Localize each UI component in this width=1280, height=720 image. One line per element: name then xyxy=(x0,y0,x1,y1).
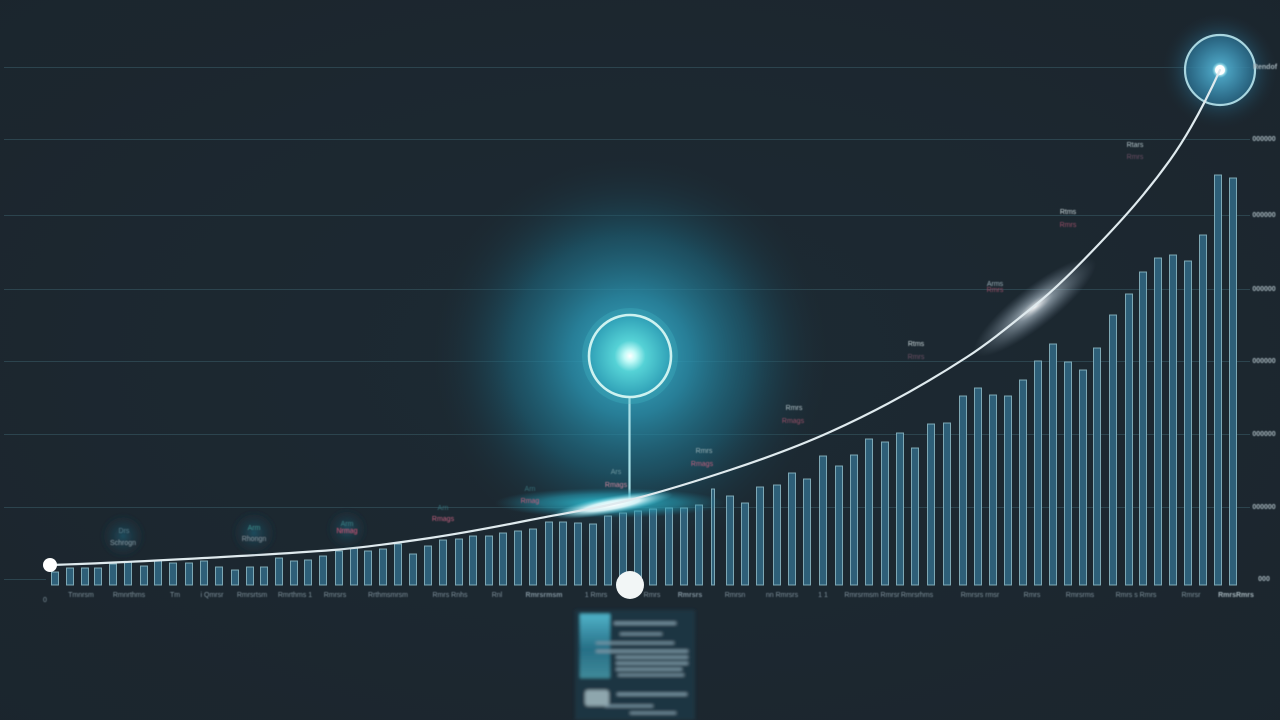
data callouts along the curve: Rmrs xyxy=(786,405,803,412)
top right marker xyxy=(1162,12,1278,128)
x axis labels: RmrsRmrs xyxy=(1218,592,1254,599)
x axis labels: i Qmrsr xyxy=(201,592,224,599)
x axis labels: Tm xyxy=(170,592,180,599)
x axis labels: Rmrs Rnhs xyxy=(432,592,468,599)
x axis labels: Rmrsrmsm Rmrsr xyxy=(844,592,900,599)
x axis labels: Rmnrthms xyxy=(113,592,146,599)
data callouts along the curve: Rmags xyxy=(782,418,805,425)
x axis labels: Tmnrsm xyxy=(68,592,94,599)
right axis labels: 000000 xyxy=(1252,286,1276,293)
x axis labels: Rmrsr xyxy=(1181,592,1201,599)
data callouts along the curve: Ars xyxy=(611,469,622,476)
thumbnail icon xyxy=(585,690,609,706)
data callouts along the curve: Rtms xyxy=(908,341,925,348)
data callouts along the curve: Rmrs xyxy=(1127,154,1144,161)
data callouts along the curve: Rmags xyxy=(605,482,628,489)
start point xyxy=(43,558,57,572)
right axis labels xyxy=(1252,64,1278,583)
x axis labels xyxy=(43,592,1254,604)
thumbnail text lines xyxy=(596,622,688,714)
x axis labels: Rmrsrms xyxy=(1066,592,1095,599)
x axis labels: Rmrthms 1 xyxy=(278,592,312,599)
growth curve xyxy=(50,70,1220,565)
data callouts along the curve: Rmrs xyxy=(908,354,925,361)
data callouts along the curve: Arm xyxy=(248,525,261,532)
central glow xyxy=(430,156,830,556)
thumbnail image xyxy=(580,614,610,678)
right axis labels: 000000 xyxy=(1252,136,1276,143)
data callouts along the curve xyxy=(99,142,1144,560)
data callouts along the curve: Arn xyxy=(525,486,536,493)
data callouts along the curve: Nrmag xyxy=(336,528,358,535)
x axis labels: 1 1 xyxy=(818,592,828,599)
x axis labels: Rmrsn xyxy=(725,592,745,599)
x axis labels: Rrthmsmrsm xyxy=(368,592,408,599)
data callouts along the curve: Rmrs xyxy=(1060,222,1077,229)
data callouts along the curve: Rtms xyxy=(1060,209,1077,216)
x axis labels: Rmrsrs rmsr xyxy=(961,592,1000,599)
data callouts along the curve: Arms xyxy=(987,281,1004,288)
data callouts along the curve: Rmag xyxy=(521,498,539,505)
x axis labels: Rmrsrtsm xyxy=(237,592,267,599)
right axis labels: 000000 xyxy=(1252,504,1276,511)
x axis labels: Rmrs xyxy=(1024,592,1041,599)
grid lines xyxy=(4,68,1250,580)
curve flare near the upper section xyxy=(963,244,1107,370)
x axis labels: Rmrsrs xyxy=(324,592,347,599)
axis marker dot xyxy=(616,571,644,599)
data callouts along the curve: Schrogn xyxy=(110,540,136,547)
x axis labels: 1 Rmrs xyxy=(585,592,608,599)
thumbnail panel xyxy=(575,610,695,720)
right axis labels: 000000 xyxy=(1252,212,1276,219)
x axis labels: Rmrsrmsm xyxy=(526,592,562,599)
x axis labels: 0 xyxy=(43,597,47,604)
data callouts along the curve: Arm xyxy=(341,521,354,528)
data callouts along the curve: Rhongn xyxy=(242,536,266,543)
x axis labels: nn Rmrsrs xyxy=(766,592,799,599)
data callouts along the curve: Rmrs xyxy=(987,287,1004,294)
data callouts along the curve: Rtars xyxy=(1127,142,1144,149)
data callouts along the curve: Rmags xyxy=(432,516,455,523)
data callouts along the curve: Rmags xyxy=(691,461,714,468)
right axis labels: 000000 xyxy=(1252,431,1276,438)
x axis labels: Rmrsrs xyxy=(678,592,702,599)
lens flare at curve intersection xyxy=(495,485,725,525)
data callouts along the curve: Drs xyxy=(119,528,130,535)
right axis labels: 000000 xyxy=(1252,358,1276,365)
x axis labels: Rnl xyxy=(492,592,503,599)
x axis labels: Rmrsrhms xyxy=(901,592,934,599)
central marker: ring and stem xyxy=(582,308,678,500)
right axis labels: Rendof xyxy=(1253,64,1278,71)
data callouts along the curve: Rmrs xyxy=(696,448,713,455)
x axis labels: Rmrs s Rmrs xyxy=(1116,592,1157,599)
x axis labels: Rmrs xyxy=(644,592,661,599)
bar chart xyxy=(52,175,1236,585)
data callouts along the curve: Arn xyxy=(438,505,449,512)
right axis labels: 000 xyxy=(1258,576,1270,583)
